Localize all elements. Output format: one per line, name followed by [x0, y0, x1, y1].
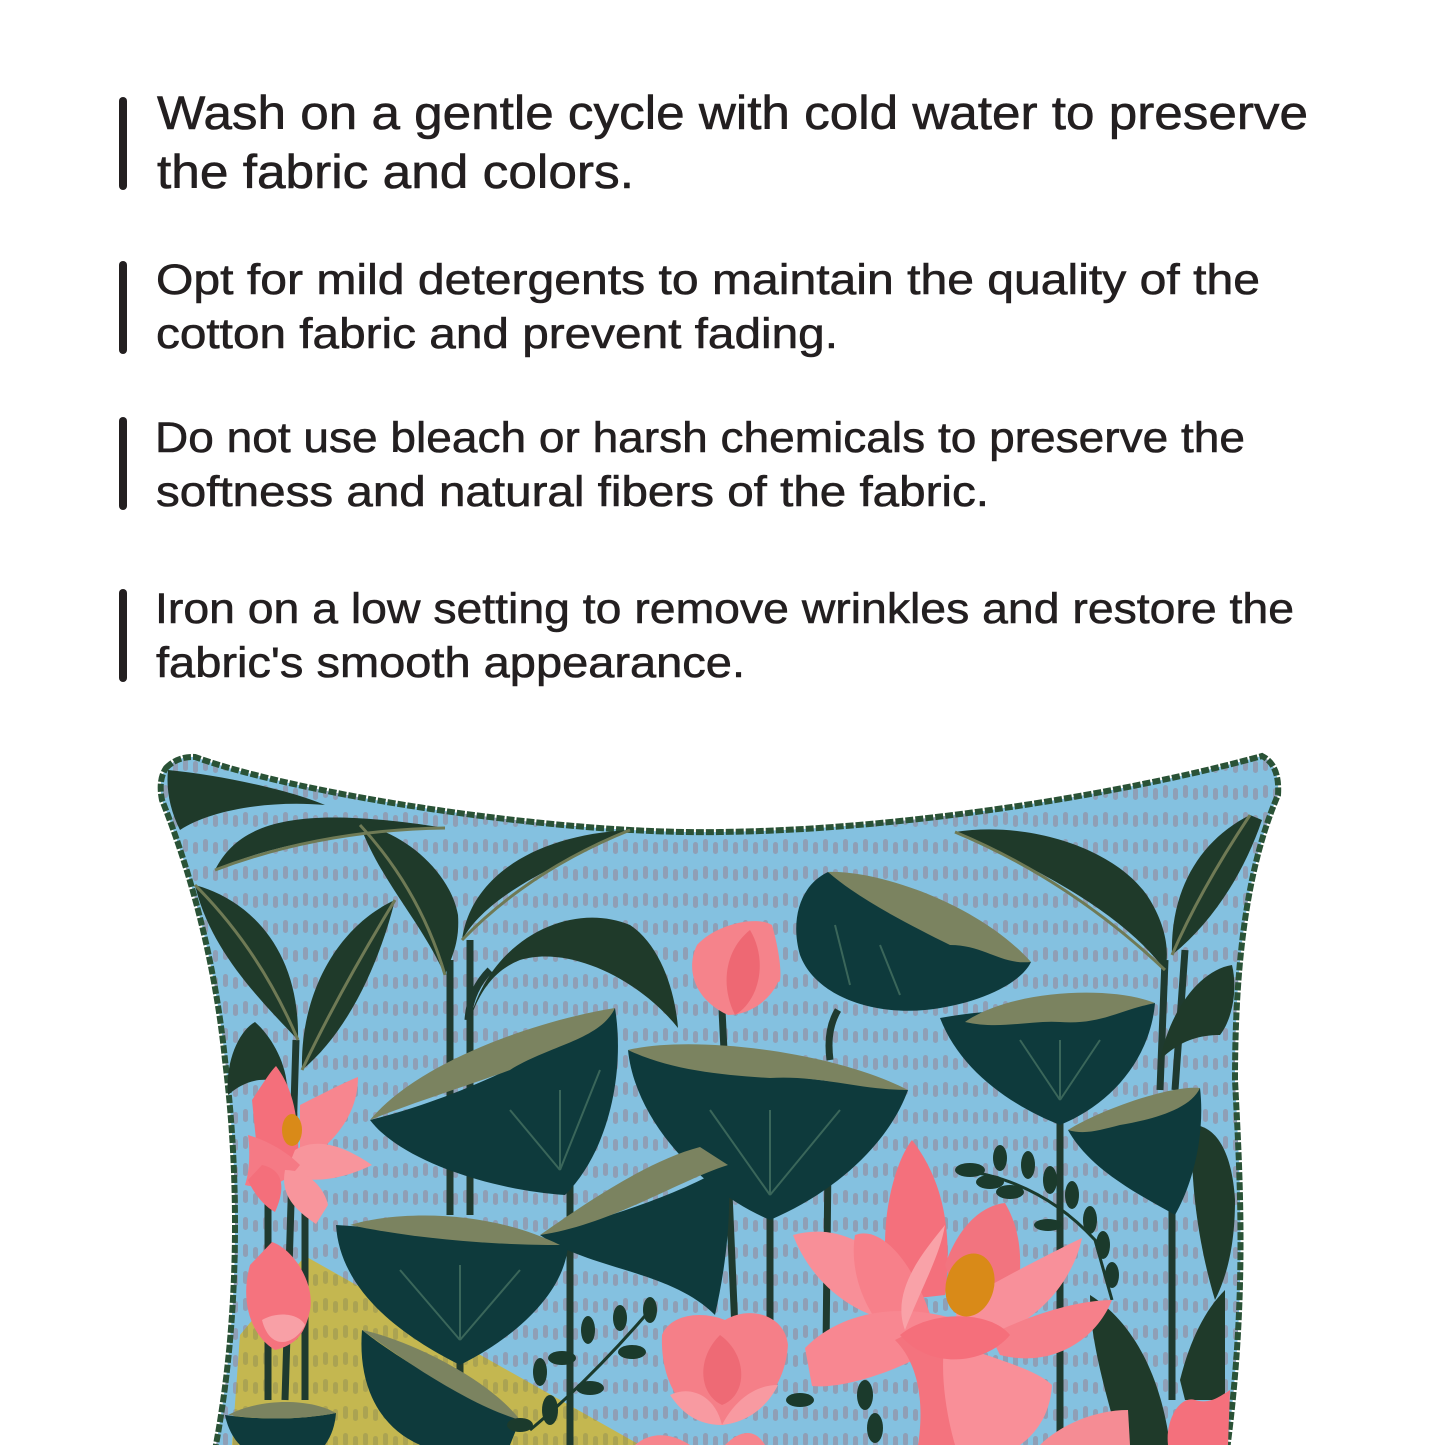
cushion body with green piping [161, 756, 1278, 1445]
yellow ground panel [232, 1256, 640, 1445]
bowl rims [228, 872, 1200, 1420]
pink lotus bud, left [246, 1242, 311, 1350]
care tip 1: the fabric and colors. [157, 145, 634, 198]
olive leaf highlights [195, 815, 1250, 1070]
small dark sprigs [507, 1145, 1119, 1443]
care tip 1: Wash on a gentle cycle with cold water to preserve [157, 86, 1308, 139]
cushion illustration [161, 756, 1278, 1445]
dark foliage leaves [168, 770, 1262, 1445]
large pink lotus [793, 1140, 1112, 1445]
background stems [268, 940, 1185, 1445]
pink lotus bud, top centre [692, 921, 780, 1015]
care tip 3: softness and natural fibers of the fabric. [156, 468, 989, 516]
care tip 4 [119, 585, 1294, 687]
lotus leaf bowls [225, 872, 1201, 1445]
care tip 1 [119, 86, 1308, 198]
pink lotus bud, centre [662, 1313, 788, 1425]
care tip 2: cotton fabric and prevent fading. [156, 310, 838, 358]
bowl veins [400, 925, 1100, 1340]
pink lotus, left [245, 1066, 372, 1224]
care tip 4: fabric's smooth appearance. [156, 639, 745, 687]
care tip 2: Opt for mild detergents to maintain the quality of the [156, 256, 1260, 304]
care tip 4: Iron on a low setting to remove wrinkles and restore the [155, 585, 1294, 633]
care tip 3 [119, 414, 1245, 516]
care tip 3: Do not use bleach or harsh chemicals to preserve the [155, 414, 1245, 462]
pink flowers, bottom edge [635, 1390, 1230, 1445]
care tip 2 [119, 256, 1260, 358]
